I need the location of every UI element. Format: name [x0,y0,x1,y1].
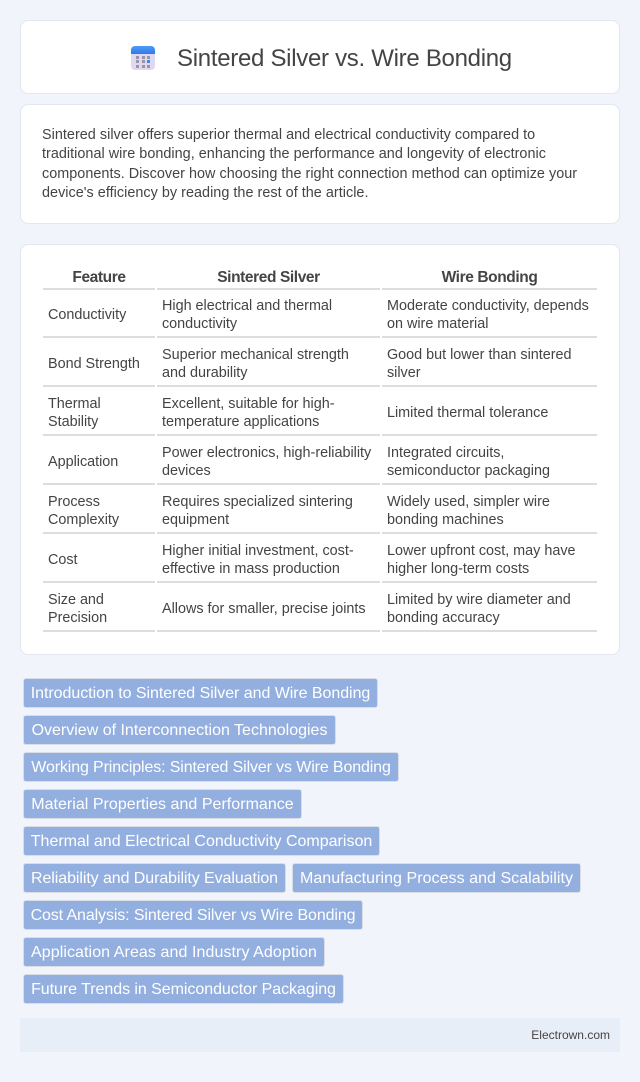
tag: Manufacturing Process and Scalability [300,870,573,887]
comparison table: semiconductor packaging [387,463,550,479]
tag: Introduction to Sintered Silver and Wire Bonding [31,685,370,702]
table header: Wire Bonding [382,268,597,290]
row: Size and Precision: Precision [48,610,107,626]
row: Application: Application [48,454,118,470]
row: Cost: Cost [48,552,78,568]
row: Process Complexity: Process [48,494,100,510]
tag [23,789,302,819]
tag [23,715,336,745]
comparison table: High electrical and thermal [162,298,332,314]
comparison table: Allows for smaller, precise joints [162,601,366,617]
row: Thermal Stability [48,396,101,430]
comparison table: Superior mechanical strength [162,347,349,363]
tag [292,863,581,893]
comparison table: effective in mass production [162,561,340,577]
comparison table: on wire material [387,316,488,332]
row: Thermal Stability: Thermal [48,396,101,412]
comparison table: Moderate conductivity, depends [387,298,589,314]
footer credit: Electrown.com [531,1028,610,1042]
comparison table: Lower upfront cost, may have [387,543,576,559]
text block: introduction [42,127,577,201]
row: Size and Precision: Size and [48,592,104,608]
table header: Sintered Silver: Sintered Silver [217,269,320,286]
table header: Wire Bonding: Wire Bonding [442,269,537,286]
comparison table: equipment [162,512,229,528]
comparison table: bonding machines [387,512,504,528]
comparison table: Good but lower than sintered [387,347,572,363]
tag: Future Trends in Semiconductor Packaging [31,981,336,998]
comparison table: bonding accuracy [387,610,500,626]
comparison table [43,269,597,632]
comparison table: Limited thermal tolerance [387,405,548,421]
icon: calendar grid [131,46,155,70]
comparison table: Requires specialized sintering [162,494,353,510]
panel: title header [20,20,620,94]
comparison table: devices [162,463,211,479]
row: Size and Precision [48,592,107,626]
row: Process Complexity [48,494,119,528]
tag: Material Properties and Performance [31,796,294,813]
tag: Application Areas and Industry Adoption [31,944,317,961]
table header: Feature [43,268,155,290]
row: Thermal Stability: Stability [48,414,98,430]
panel: comparison table [20,244,620,655]
tag [23,678,378,708]
tag [23,937,325,967]
tag: Overview of Interconnection Technologies [32,722,327,739]
text block: introduction: Sintered silver offers superior thermal and electrical conductivity compared to [42,127,535,143]
comparison table: conductivity [162,316,237,332]
comparison table: Integrated circuits, [387,445,504,461]
table header: Sintered Silver [157,268,380,290]
row: Process Complexity: Complexity [48,512,119,528]
tag: Working Principles: Sintered Silver vs Wire Bonding [31,759,391,776]
tag [23,900,363,930]
comparison table: silver [387,365,421,381]
tag: Cost Analysis: Sintered Silver vs Wire Bonding [31,907,355,924]
comparison table: higher long-term costs [387,561,529,577]
comparison table: and durability [162,365,247,381]
tag: Thermal and Electrical Conductivity Comparison [31,833,372,850]
tag [23,974,344,1004]
tag [23,752,399,782]
tag [23,826,380,856]
comparison table: Power electronics, high-reliability [162,445,371,461]
footer [20,1018,620,1052]
panel: introduction [20,104,620,224]
comparison table: Higher initial investment, cost- [162,543,354,559]
topic tag list [23,678,581,1004]
tag: Reliability and Durability Evaluation [31,870,278,887]
table header: Feature: Feature [72,269,126,286]
comparison table: Excellent, suitable for high- [162,396,334,412]
comparison table: temperature applications [162,414,319,430]
row: Bond Strength: Bond Strength [48,356,140,372]
title: Sintered Silver vs. Wire Bonding [177,45,512,72]
text block: introduction: traditional wire bonding, enhancing the performance and longevity of electronic [42,146,546,162]
text block: introduction: device's efficiency by reading the rest of the article. [42,185,368,201]
comparison table: Widely used, simpler wire [387,494,550,510]
row: Conductivity: Conductivity [48,307,126,323]
comparison table: Limited by wire diameter and [387,592,571,608]
text block: introduction: components. Discover how choosing the right connection method can optimize your [42,166,577,182]
tag [23,863,286,893]
